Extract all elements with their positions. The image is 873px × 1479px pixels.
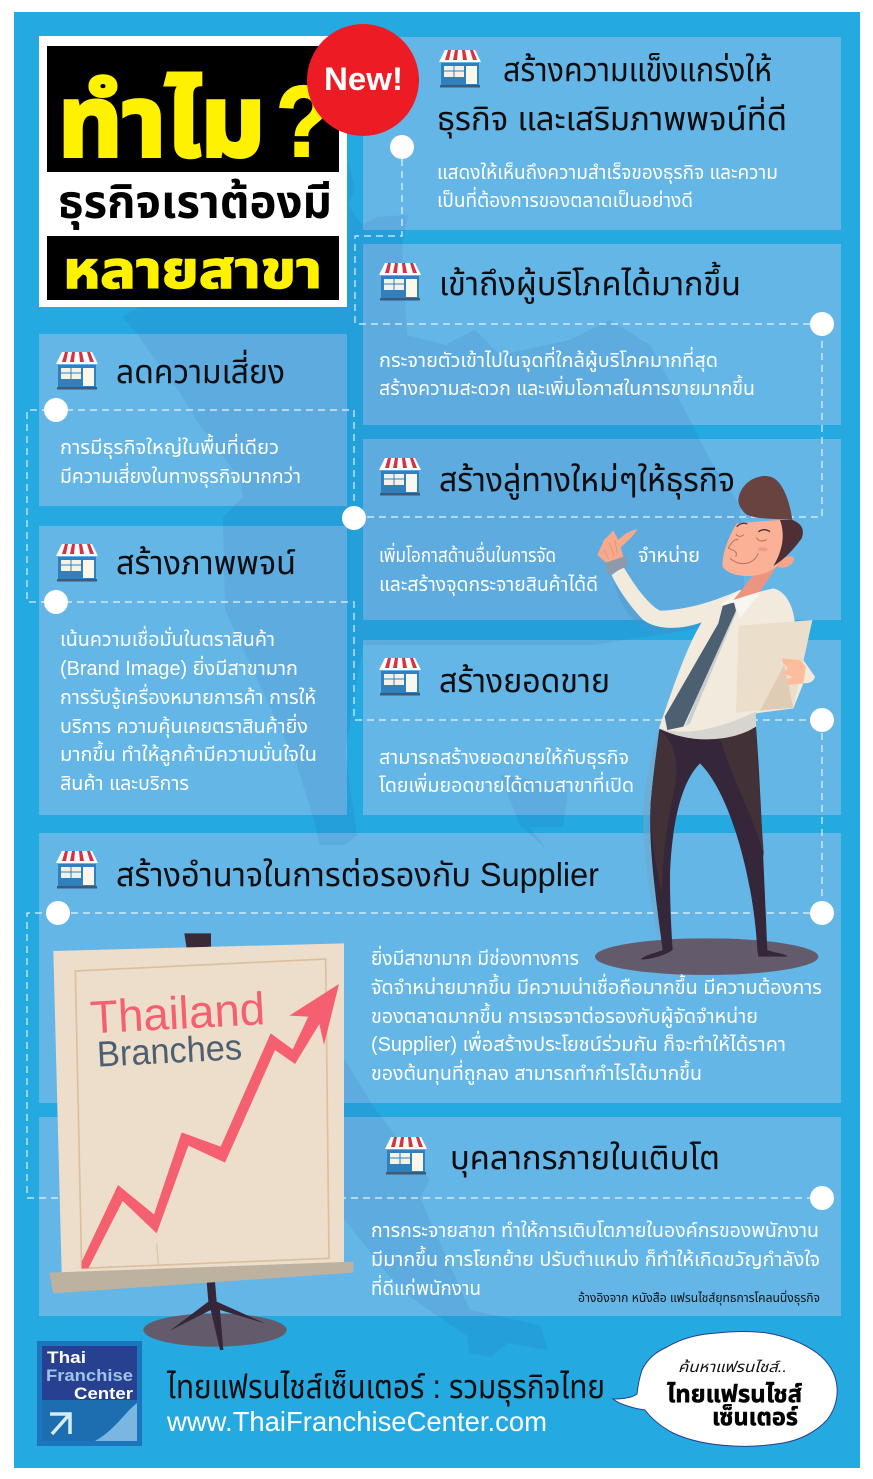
text: new channels: และสร้างจุดกระจายสินค้าได้ดี — [379, 573, 598, 596]
text: reach consumers — [379, 346, 755, 400]
heading: build strength: ธุรกิจ และเสริมภาพพจน์ที่ดี — [437, 96, 787, 139]
text: personnel: ที่ดีแก่พนักงาน — [371, 1274, 481, 1300]
speech bubble: เซ็นเตอร์ — [712, 1404, 798, 1431]
heading: build strength: สร้างความแข็งแกร่งให้ — [503, 51, 772, 88]
text: sales: โดยเพิ่มยอดขายได้ตามสาขาที่เปิด — [379, 771, 634, 797]
text: supplier: ของต้นทุนที่ถูกลง สามารถทำกำไรได้มากขึ้น — [371, 1059, 702, 1086]
text: personnel — [371, 1219, 820, 1300]
text: supplier: ของตลาดมากขึ้น การเจรจาต่อรองกับผู้จัดจำหน่าย — [371, 1002, 758, 1029]
source note: อ้างอิงจาก หนังสือ แฟรนไชส์ยุทธการโคลนนิ่งธุรกิจ — [578, 1290, 820, 1305]
logo: Thai Franchise Center: Center — [74, 1384, 133, 1403]
icon: shop — [379, 458, 421, 496]
text: image: บริการ ความคุ้นเคยตราสินค้ายิ่ง — [60, 713, 308, 738]
text: build strength: แสดงให้เห็นถึงความสำเร็จของธุรกิจ และความ — [437, 161, 778, 184]
text: build strength: เป็นที่ต้องการของตลาดเป็นอย่างดี — [437, 186, 693, 212]
title block: ทำไม — [58, 66, 265, 178]
icon: shop — [56, 544, 98, 582]
panel: new channels — [363, 439, 841, 620]
panel: personnel — [39, 1117, 841, 1316]
speech bubble: ไทยแฟรนไชส์ — [667, 1381, 802, 1408]
text: reach consumers: กระจายตัวเข้าไปในจุดที่ใกล้ผู้บริโภคมากที่สุด — [379, 346, 718, 373]
text: personnel: การกระจายสาขา ทำให้การเติบโตภายในองค์กรของพนักงาน — [371, 1219, 819, 1242]
illustration: presentation board: Branches — [96, 1026, 243, 1075]
icon: shop — [385, 1137, 427, 1174]
panel: image — [39, 526, 347, 815]
heading: new channels: สร้างลู่ทางใหม่ๆให้ธุรกิจ — [439, 461, 735, 500]
icon: shop — [56, 851, 98, 888]
timeline connector — [27, 135, 834, 1210]
illustration: presentation board — [49, 933, 353, 1350]
footer text: website: www.ThaiFranchiseCenter.com — [166, 1406, 547, 1437]
text: image: สินค้า และบริการ — [60, 772, 189, 795]
text: sales: สามารถสร้างยอดขายให้กับธุรกิจ — [379, 746, 629, 769]
illustration: businessman — [595, 476, 818, 975]
text: reduce risk: มีความเสี่ยงในทางธุรกิจมากกว่า — [60, 462, 301, 488]
heading: personnel: บุคลากรภายในเติบโต — [450, 1139, 720, 1178]
title block: ธุรกิจเราต้องมี — [58, 176, 332, 230]
heading: reach consumers: เข้าถึงผู้บริโภคได้มากขึ้น — [439, 261, 741, 304]
text: new channels: เพิ่มโอกาสด้านอื่นในการจัด — [379, 541, 556, 567]
panel: sales — [363, 640, 841, 815]
text: supplier — [371, 945, 822, 1086]
text: personnel: มีมากขึ้น การโยกย้าย ปรับตำแหน่ง ก็ทำให้เกิดขวัญกำลังใจ — [371, 1245, 820, 1271]
panel: supplier — [39, 833, 841, 1103]
title block — [39, 36, 347, 307]
icon: shop — [379, 263, 421, 300]
badge: New: New! — [324, 61, 403, 97]
icon: shop — [439, 50, 481, 88]
logo: Thai Franchise Center — [37, 1341, 142, 1446]
text: supplier: ยิ่งมีสาขามาก มีช่องทางการ — [371, 945, 579, 970]
map of Thailand watermark — [122, 160, 745, 1357]
badge: New — [307, 24, 419, 136]
title block: หลายสาขา — [63, 242, 322, 300]
panel: reduce risk — [39, 334, 347, 506]
text: new channels — [379, 541, 700, 596]
text: image — [60, 625, 317, 795]
heading: supplier: สร้างอำนาจในการต่อรองกับ Supplier — [116, 856, 599, 893]
text: image: การรับรู้เครื่องหมายการค้า การให้ — [60, 683, 316, 710]
icon: shop — [379, 658, 421, 696]
heading: reduce risk: ลดความเสี่ยง — [116, 349, 285, 390]
text: image: เน้นความเชื่อมั่นในตราสินค้า — [60, 625, 275, 651]
icon: shop — [56, 352, 98, 390]
panel: build strength — [363, 37, 841, 230]
speech bubble — [613, 1332, 837, 1446]
panel: reach consumers — [363, 244, 841, 425]
text: image: (Brand Image) ยิ่งมีสาขามาก — [60, 655, 298, 680]
heading: sales: สร้างยอดขาย — [439, 662, 610, 699]
title block: ? — [276, 66, 331, 178]
text: reach consumers: สร้างความสะดวก และเพิ่มโอกาสในการขายมากขึ้น — [379, 374, 755, 400]
text: reduce risk — [60, 433, 301, 488]
logo: Thai Franchise Center: Thai — [47, 1348, 86, 1367]
illustration: presentation board: Thailand — [89, 982, 266, 1043]
logo: Thai Franchise Center: Franchise — [46, 1366, 133, 1385]
text: sales — [379, 746, 634, 797]
text: supplier: จัดจำหน่ายมากขึ้น มีความน่าเชื่อถือมากขึ้น มีความต้องการ — [371, 973, 822, 999]
text: image: มากขึ้น ทำให้ลูกค้ามีความมั่นใจใน — [60, 740, 317, 767]
heading: image: สร้างภาพพจน์ — [116, 544, 296, 581]
heading: build strength — [437, 51, 787, 139]
speech bubble: ค้นหาแฟรนไชส์.. — [678, 1359, 787, 1376]
text: reduce risk: การมีธุรกิจใหญ่ในพื้นที่เดียว — [60, 433, 279, 459]
footer text: company: ไทยแฟรนไชส์เซ็นเตอร์ : รวมธุรกิจไทย — [166, 1368, 605, 1407]
text: supplier: (Supplier) เพื่อสร้างประโยชน์ร่วมกัน ก็จะทำให้ได้ราคา — [371, 1030, 786, 1056]
text: build strength — [437, 161, 778, 212]
text: new channels: จำหน่าย — [638, 544, 700, 567]
